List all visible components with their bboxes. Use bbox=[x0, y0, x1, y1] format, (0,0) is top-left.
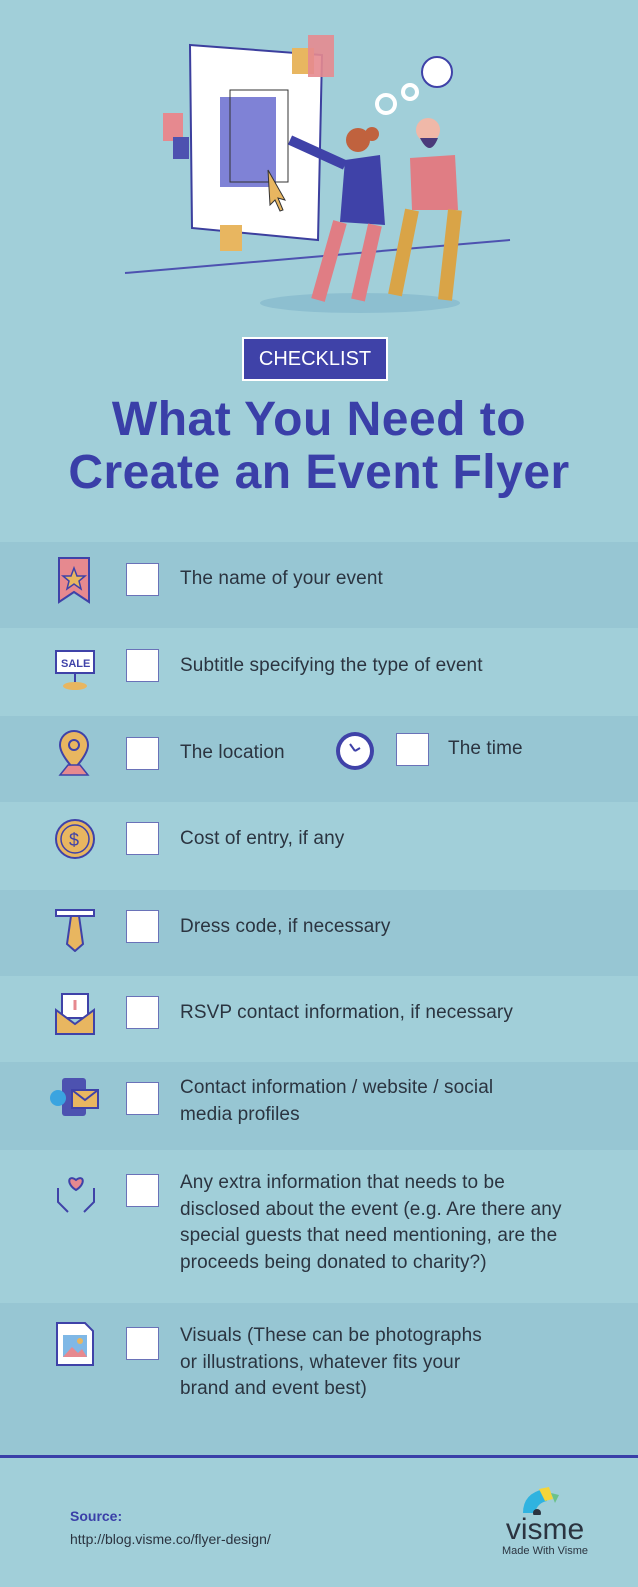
row 9: Visuals (These can be photographs bbox=[180, 1325, 482, 1346]
row 8 bbox=[57, 1172, 562, 1272]
icon: bookmark star bbox=[58, 557, 90, 604]
icon: coin: $ bbox=[69, 830, 79, 850]
bulb & gears bbox=[422, 57, 452, 87]
icon: heart hands bbox=[57, 1177, 95, 1213]
floor shadow bbox=[260, 293, 460, 313]
source bbox=[70, 1508, 271, 1547]
row 3: The location bbox=[180, 742, 285, 763]
icon: picture file bbox=[56, 1322, 94, 1366]
source: Source: bbox=[70, 1508, 122, 1524]
row 2 bbox=[55, 649, 483, 690]
woman bbox=[346, 128, 370, 152]
row 1 bbox=[0, 542, 638, 628]
row 7: media profiles bbox=[180, 1104, 300, 1124]
row 4: Cost of entry, if any bbox=[180, 828, 344, 849]
checklist badge: CHECKLIST bbox=[259, 348, 371, 370]
title: Create an Event Flyer bbox=[68, 446, 570, 499]
row 6: RSVP contact information, if necessary bbox=[180, 1002, 513, 1023]
icon: sale sign bbox=[55, 650, 95, 690]
source: http://blog.visme.co/flyer-design/ bbox=[70, 1531, 271, 1547]
row 7: Contact information / website / social bbox=[180, 1077, 493, 1098]
row 8: special guests that need mentioning, are the bbox=[180, 1225, 557, 1246]
icon: phone social bbox=[50, 1078, 99, 1116]
row 8: Any extra information that needs to be bbox=[180, 1172, 505, 1193]
row 3 bbox=[0, 716, 638, 802]
title: What You Need to bbox=[112, 393, 526, 446]
man bbox=[416, 118, 440, 142]
row 2: Subtitle specifying the type of event bbox=[180, 655, 483, 676]
icon: tie bbox=[55, 909, 95, 952]
visme logo bbox=[502, 1487, 588, 1557]
icon: coin bbox=[55, 819, 95, 859]
visme logo: visme bbox=[506, 1513, 584, 1546]
row 8: proceeds being donated to charity?) bbox=[180, 1252, 487, 1272]
checklist badge bbox=[242, 337, 388, 381]
icon: sale sign: SALE bbox=[61, 658, 90, 670]
icon: clock bbox=[336, 732, 374, 770]
row 9: or illustrations, whatever fits your bbox=[180, 1352, 460, 1372]
illustration bbox=[124, 35, 510, 313]
divider line bbox=[0, 1455, 638, 1458]
row 7 bbox=[0, 1062, 638, 1150]
icon: envelope bbox=[55, 993, 95, 1035]
row 4 bbox=[55, 819, 344, 859]
row 5 bbox=[0, 890, 638, 976]
board bbox=[190, 45, 322, 240]
icon: location pin bbox=[58, 730, 90, 776]
row 9 bbox=[0, 1303, 638, 1455]
row 8: disclosed about the event (e.g. Are there any bbox=[180, 1198, 562, 1220]
row 6 bbox=[55, 993, 513, 1035]
title bbox=[68, 393, 570, 499]
visme logo: Made With Visme bbox=[502, 1545, 588, 1557]
row 9: brand and event best) bbox=[180, 1378, 367, 1399]
row 5: Dress code, if necessary bbox=[180, 916, 390, 937]
row 3: The time bbox=[448, 738, 523, 759]
row 1: The name of your event bbox=[180, 568, 383, 589]
